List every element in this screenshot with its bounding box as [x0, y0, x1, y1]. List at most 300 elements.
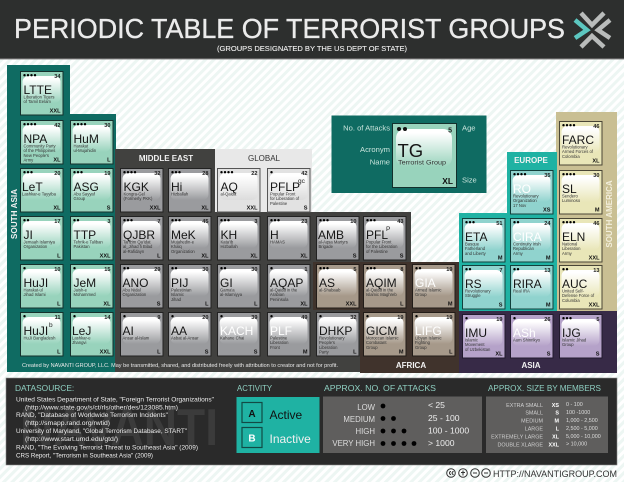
cell: MeK: Mujahedin-e — [171, 240, 195, 244]
cell: Hi: Hizballah — [171, 192, 189, 196]
cell: PFLP gc: Palestine — [270, 201, 288, 206]
cell: LeT: 20 — [54, 171, 60, 177]
panel: datasource: (http://smapp.rand.org/rwtid) — [25, 420, 110, 427]
cell: PLF: PLF — [270, 324, 292, 338]
panel: datasource: CRS Report, "Terrorism in Southeast Asia" (2009) — [16, 452, 153, 460]
cell: ANO: Organization — [122, 292, 147, 297]
panel: approx size by members: L — [556, 426, 560, 432]
cell: AUC: 13 — [593, 268, 600, 274]
cell: LeJ: LeJ — [72, 324, 91, 338]
cell: TTP: Pakistan — [74, 244, 90, 249]
panel: approx size by members: > 10,000 — [566, 442, 587, 448]
cell: ETA: ETA — [465, 230, 487, 244]
cell: AI — [120, 312, 163, 356]
cell: AQ — [218, 168, 260, 212]
cell: CIRA — [510, 218, 553, 262]
cell: PIJ: PIJ — [171, 276, 188, 290]
cell: NPA: of the Philippines — [24, 148, 55, 153]
cell: TTP — [70, 216, 113, 260]
cell: PIJ — [168, 264, 211, 308]
cell: AQAP: al-Qaida in the — [270, 288, 298, 292]
cell: AA: Asbat al-Ansar — [171, 336, 199, 340]
cell: LTTE — [20, 72, 63, 115]
cell: JeM: 15 — [104, 267, 110, 273]
cell: RO: Organization — [513, 198, 537, 203]
cell: QJBR: al_Jihad fi Bilad — [123, 244, 153, 249]
credit line: Created by NAVANTI GROUP, LLC. May be transmitted, shared, and distributed freely with attribution to creator and not for profit. — [22, 363, 338, 369]
panel: datasource: DATASOURCE: — [15, 383, 74, 393]
cell: IMU: Movement — [465, 342, 485, 347]
cell: AS: al-Shabaab — [319, 288, 341, 292]
cell: JI: Jemaah Islamiya — [24, 240, 56, 244]
cell: GICM: M — [399, 350, 404, 356]
panel: approx size by members: APPROX. SIZE BY MEMBERS — [488, 384, 601, 393]
cell: HuJI: 10 — [54, 267, 60, 273]
panel: approx size by members: 100 -1000 — [566, 410, 590, 416]
cell: PFLP gc: PFLP — [270, 180, 300, 194]
cell: PLF: Liberation — [270, 340, 289, 345]
cell: MeK: Khalq — [171, 244, 182, 249]
cell: KACH: S — [254, 350, 258, 356]
legend panel: key to a cell: 5 — [448, 128, 452, 134]
cell: JeM — [70, 264, 113, 308]
cell: Hi: XL — [201, 206, 209, 212]
legend panel: key to a cell: Terrorist Group — [398, 160, 446, 166]
cell: PFLP gc: for Liberation of — [270, 196, 300, 201]
panel: activity key: ACTIVITY — [237, 384, 273, 393]
cell: ELN: National — [562, 242, 577, 246]
cell: PFL p: Popular Front — [366, 240, 392, 244]
cell: PFLP gc: 42 — [301, 171, 308, 177]
cell: AUC: AUC — [562, 277, 588, 291]
cell: H: HAMAS — [270, 240, 285, 244]
cell: ELN: XXL — [589, 256, 600, 262]
cell: Hi — [168, 168, 211, 212]
cell: AS: AS — [319, 276, 335, 290]
cell: RIRA: 13 — [544, 268, 550, 274]
cell: DHKP: People's — [319, 340, 335, 345]
cell: H — [268, 216, 310, 260]
cell: AUC — [560, 266, 602, 309]
cell: ELN — [560, 218, 602, 262]
panel: approx size by members: M — [554, 418, 560, 424]
cell: GIA: Group — [415, 292, 427, 297]
cell: ASG: S — [107, 206, 111, 212]
cell: HuJI: Harakat-ul — [24, 288, 43, 292]
cell: KH: KH — [220, 228, 237, 242]
cell: RO: Revolutionary — [513, 194, 540, 198]
cell: QJBR — [120, 216, 163, 260]
cell: RS — [462, 266, 505, 309]
cell: IMU: XL — [495, 352, 503, 358]
cell: JeM: Mohammed — [74, 292, 96, 297]
panel: South Asia — [7, 65, 116, 372]
cell: AUC: Columbia — [562, 298, 580, 303]
cell: LTTE: of Tamil Eelam — [24, 99, 51, 104]
heading: South America: SOUTH AMERICA — [605, 180, 614, 248]
cell: AI: Ansar al-Islam — [122, 336, 150, 340]
cell: GIA: M — [448, 302, 453, 308]
legend panel: key to a cell: Size — [462, 176, 477, 184]
cell: RIRA: RIRA — [513, 277, 542, 291]
panel: approx number of attacks: 100 - 1000 — [428, 426, 469, 436]
panel: approx size by members: SMALL — [525, 410, 543, 416]
cell: RIRA: Real IRA — [513, 288, 530, 294]
cell: KH: Hizballah — [220, 244, 238, 249]
cell: PFLP gc — [268, 168, 310, 212]
panel: South America — [556, 112, 617, 312]
cell: ANO: S — [157, 302, 161, 308]
legend panel: key to a cell — [332, 116, 486, 193]
cell: ETA: M — [498, 256, 503, 262]
cell: LTTE: LTTE — [24, 83, 52, 97]
cell: NPA: New People's — [24, 153, 49, 158]
cell: ELN: ELN — [562, 230, 585, 244]
cell: IMU — [462, 314, 505, 358]
cell: MeK: MeK — [171, 228, 196, 242]
cell: GIA: GIA — [415, 276, 436, 290]
panel: approx size by members: EXTRA SMALL — [506, 403, 543, 409]
cell: CIRA: CIRA — [513, 230, 542, 244]
panel: approx number of attacks: HIGH — [356, 427, 375, 436]
cell: ETA — [462, 218, 505, 262]
cell: H: XL — [300, 254, 308, 260]
cell: RO: 35 — [544, 173, 550, 179]
cell: CIRA: Republican — [513, 246, 535, 251]
cell: SL: Luminoso — [562, 198, 581, 203]
cell: RS: Revolutionary — [465, 288, 492, 294]
cell: FARC: 46 — [593, 124, 600, 130]
cell: TTP: TTP — [74, 228, 96, 242]
cell: FARC: Armed Forces of — [562, 149, 594, 154]
panel: activity key: Inactive — [270, 432, 311, 446]
heading: Asia: ASIA — [521, 361, 541, 370]
heading: Europe: EUROPE — [514, 156, 549, 165]
icon: active A: A — [248, 409, 256, 420]
legend panel: key to a cell: XL — [442, 176, 453, 186]
cell: AMB: Brigade — [318, 244, 334, 249]
cell: HuJI b — [20, 312, 63, 356]
cell: SL: M — [595, 208, 600, 214]
panel: approx number of attacks — [323, 384, 482, 453]
cell: JeM: XL — [103, 302, 111, 308]
cell: AMB: S — [353, 254, 357, 260]
cell: AS — [316, 264, 359, 308]
cell: RO: XS — [543, 208, 551, 214]
cell: AQ: XXL — [247, 206, 258, 212]
panel: approx size by members: EXTREMELY LARGE — [491, 434, 543, 440]
cell: CIRA: M — [546, 256, 551, 262]
cell: ELN: Liberation — [562, 246, 581, 251]
cell: H: 23 — [301, 219, 308, 225]
cell: QJBR: QJBR — [123, 228, 155, 242]
cell: SL: Sendero — [562, 194, 579, 198]
cell: HuM — [70, 120, 113, 164]
cell: ASh: 26 — [544, 317, 550, 323]
cell: ASG: ASG — [74, 180, 99, 194]
cell: LTTE: XXL — [50, 108, 61, 114]
cell: RS: Struggle — [465, 293, 481, 298]
cell: QJBR: al-Rafidayn — [123, 249, 145, 254]
icon: Navanti logo — [575, 13, 610, 47]
cell: HuJI: HuJI — [24, 276, 48, 290]
cell: AQAP: AQAP — [270, 276, 303, 290]
cell: RO: 17 Nov — [513, 203, 527, 208]
cell: ANO: 29 — [154, 267, 160, 273]
cell: MeK: 45 — [202, 219, 208, 225]
cell: AQIM: Islamic Maghreb — [366, 292, 397, 297]
cell: PFL p: of Palestine — [366, 249, 389, 254]
cell: FARC: FARC — [562, 133, 594, 147]
cell: AI: AI — [122, 324, 134, 338]
cell: PIJ: L — [205, 302, 209, 308]
cell: ANO: ANO — [122, 276, 149, 290]
heading: Middle East: MIDDLE EAST — [139, 154, 193, 163]
cell: AQIM: L — [400, 302, 404, 308]
cell: JI: 17 — [54, 219, 60, 225]
panel: approx number of attacks: > 1000 — [428, 438, 455, 448]
cell: AA: 20 — [202, 315, 208, 321]
footer url: HTTP://NAVANTIGROUP.COM — [493, 468, 617, 479]
cell: LIFG: Fighting — [415, 340, 431, 345]
cell: LeT: XL — [53, 206, 61, 212]
cell: NPA: XL — [53, 158, 61, 164]
cell: LeJ: Jhangvi — [72, 340, 87, 345]
cell: GI: al-Islamiyya — [220, 292, 243, 297]
cell: MeK: XL — [201, 254, 209, 260]
cell: AQ: al-Qaida — [220, 192, 237, 196]
cell: NPA: Army — [24, 158, 34, 163]
cell: PFL p: 43 — [397, 219, 404, 225]
cell: FARC: Colombia — [562, 154, 580, 159]
cell: RS: RS — [465, 277, 482, 291]
panel: datasource: RAND, "Database of Worldwide Terrorism Incidents" — [16, 412, 168, 419]
cell: LIFG: Libyan Islamic — [415, 336, 442, 340]
panel: approx size by members: 1,000 - 2,500 — [566, 418, 598, 424]
cell: IMU: of Uzbekistan — [465, 347, 491, 352]
cell: KGK: (Formerly PKK) — [124, 196, 153, 201]
cell: LIFG — [412, 312, 455, 356]
cell: KGK — [120, 168, 163, 212]
cell: AQ: AQ — [220, 180, 238, 194]
cell: AA: AA — [171, 324, 187, 338]
cell: GI: GI — [220, 276, 233, 290]
cell: HuJI: Jihad Islami — [24, 292, 46, 297]
cell: PFLP gc: Popular Front — [270, 192, 296, 196]
cell: AQIM: al-Qaida in the — [366, 288, 394, 292]
panel: datasource: University of Maryland, "Global Terrorism Database, START" — [16, 428, 187, 435]
cell: AS: XXL — [346, 302, 357, 308]
cell: ASh: Aum Shinrikyo — [513, 338, 541, 342]
cell: GIA: 19 — [446, 267, 452, 273]
cell: PLF: 49 — [301, 315, 308, 321]
heading: Global: GLOBAL — [248, 154, 281, 163]
panel: Europe — [459, 152, 557, 312]
cell: PIJ: 30 — [202, 267, 208, 273]
cell: AQIM: 8 — [400, 267, 404, 273]
cell: FARC — [560, 122, 602, 165]
cell: PFL p: PFL — [366, 228, 388, 242]
cell: NPA: Community Party — [24, 144, 57, 148]
cell: PLF: Palestine — [270, 336, 288, 340]
cell: HuJI — [20, 264, 63, 308]
cell: PFLP gc: gc — [298, 178, 306, 185]
panel: datasource: United States Department of State, "Foreign Terrorist Organizations" — [16, 396, 214, 404]
cell: PLF — [268, 312, 310, 356]
panel: approx number of attacks: LOW — [357, 403, 376, 412]
cell: LIFG: L — [449, 350, 453, 356]
panel: approx size by members: MEDIUM — [521, 418, 543, 424]
cell: AQ: 22 — [251, 171, 258, 177]
cell: IJG: 5 — [596, 317, 600, 323]
cell: MeK — [168, 216, 211, 260]
cell: JeM: JeM — [74, 276, 96, 290]
cell: LIFG: LIFG — [415, 324, 442, 338]
cell: FARC: XL — [592, 158, 600, 164]
cell: PFL p: S — [400, 254, 404, 260]
cell: AQAP: XL — [300, 302, 308, 308]
watermark: NAVANTI — [20, 399, 218, 457]
panel: approx number of attacks: 25 - 100 — [428, 413, 460, 423]
cell: AMB: al-Aqsa Martyrs — [318, 240, 348, 244]
panel: datasource — [15, 383, 214, 460]
cell: KGK: KGK — [124, 180, 149, 194]
cell: HuJI b: HuJI Bangladesh — [24, 336, 56, 340]
cell: HuM: Harakat — [74, 144, 89, 148]
cell: RO: RO — [513, 182, 531, 196]
cell: KGK: 32 — [154, 171, 160, 177]
panel: datasource: (http://www.state.gov/s/ct/rls/other/des/123085.htm) — [25, 404, 178, 412]
cell: RIRA: M — [546, 302, 551, 308]
cell: PFLP gc: S — [304, 206, 308, 212]
cell: AMB — [316, 216, 359, 260]
cell: NPA: 42 — [54, 123, 60, 129]
cell: AS: 5 — [353, 267, 356, 273]
panel: approx number of attacks: VERY HIGH — [332, 439, 375, 448]
cell: GI — [218, 264, 260, 308]
cell: SL: SL — [562, 182, 577, 196]
cell: KGK: Kongra-Gel — [124, 192, 145, 196]
cell: GIA: Armed Islamic — [415, 288, 442, 292]
cell: PIJ: Islamic — [171, 292, 184, 297]
cell: JI — [20, 216, 63, 260]
legend panel: key to a cell: No. of Attacks — [343, 124, 390, 132]
cell: DHKP: Liberation — [319, 345, 338, 350]
cell: KACH: KACH — [220, 324, 253, 338]
cell: Hi: 28 — [202, 171, 208, 177]
cell: AI: 9 — [157, 315, 160, 321]
cell: HuM: 30 — [104, 123, 110, 129]
cell: GI: Gama'a — [220, 288, 235, 292]
cell: IJG: Group — [562, 342, 574, 347]
title: PERIODIC TABLE OF TERRORIST GROUPS — [14, 13, 565, 44]
cell: AQIM: AQIM — [366, 276, 397, 290]
panel: approx size by members: 0 - 100 — [566, 402, 583, 408]
cell: JI: JI — [24, 228, 33, 242]
cell: IJG — [560, 314, 602, 358]
cell: RS: 7 — [499, 268, 502, 274]
panel: approx size by members: 2,500 - 5,000 — [566, 426, 598, 432]
cell: GI: 30 — [251, 267, 258, 273]
cell: NPA — [20, 120, 63, 164]
header banner — [0, 0, 624, 60]
cell: LTTE: Liberation Tigers — [24, 94, 54, 100]
cell: LTTE: 34 — [54, 74, 61, 80]
cell: HuJI b: 11 — [55, 315, 60, 321]
cell: PFL p: P — [386, 226, 390, 233]
panel: Middle East — [115, 149, 411, 372]
cell: LIFG: 19 — [446, 315, 452, 321]
cell: GICM: Group — [366, 345, 378, 350]
cell: PLF: M — [303, 350, 308, 356]
cell: LeT: Lashkar-e Tayyiba — [22, 192, 57, 196]
cell: LeT: LeT — [22, 180, 43, 194]
cell: AUC: Defense Force of — [562, 293, 595, 298]
panel: Global — [215, 149, 312, 212]
cell: H: H — [270, 228, 279, 242]
cell: AQAP: Peninsula — [270, 297, 289, 302]
cell: CIRA: Army — [513, 251, 524, 256]
cell: GICM: Combatant — [366, 340, 387, 345]
cell: LeJ: XXL — [100, 350, 111, 356]
cell: AA: S — [205, 350, 209, 356]
panel: Asia — [459, 311, 617, 373]
cell: AUC: United Self- — [562, 288, 584, 294]
cell: IMU: Islamic — [465, 338, 478, 342]
cell: IJG: S — [596, 352, 600, 358]
cell: HuJI: L — [57, 302, 61, 308]
cell: ANO: Abu Nidal — [122, 288, 141, 292]
cell: AQAP: 1 — [304, 267, 308, 273]
icons: creative commons licence — [447, 469, 490, 477]
cell: SL — [560, 170, 602, 214]
cell: KACH — [218, 312, 260, 356]
cell: KH: 3 — [254, 219, 258, 225]
cell: ETA: Basque — [465, 242, 480, 246]
panel: approx size by members: DOUBLE XLARGE — [497, 442, 543, 448]
cell: ASh — [510, 314, 553, 358]
cell: LeT — [20, 168, 63, 212]
cell: ASh: S — [547, 352, 551, 358]
cell: ASG: Abu Sayyaf — [74, 192, 96, 196]
panel: approx size by members: XXL — [549, 442, 560, 448]
cell: PIJ: Palestinian — [171, 288, 192, 292]
cell: DHKP: Party — [319, 350, 330, 355]
cell: KGK: XXL — [150, 206, 161, 212]
heading: Africa: AFRICA — [396, 361, 426, 370]
cell: IMU: 19 — [496, 317, 502, 323]
panel: approx number of attacks: APPROX. NO. OF ATTACKS — [324, 384, 436, 393]
heading: South Asia: SOUTH ASIA — [10, 189, 19, 239]
panel: approx size by members: 5,000 - 10,000 — [566, 434, 601, 440]
cell: PIJ: Jihad — [171, 297, 182, 302]
cell: ASG — [70, 168, 113, 212]
cell: GICM: 19 — [397, 315, 404, 321]
cell: ETA: 51 — [496, 221, 502, 227]
cell: AQAP: Arabian — [270, 292, 285, 297]
legend panel: key to a cell: Name — [370, 158, 390, 166]
cell: PFL p — [364, 216, 406, 260]
cell: HuJI b: HuJI — [24, 324, 48, 338]
cell: DHKP — [316, 312, 359, 356]
icon: inactive B: B — [248, 434, 256, 444]
cell: SL: 30 — [593, 173, 600, 179]
cell: TTP: XXL — [100, 254, 111, 260]
panel: approx size by members: LARGE — [525, 426, 543, 432]
cell: ASG: Group — [74, 196, 86, 201]
cell: QJBR: L — [157, 254, 161, 260]
cell: AUC: XXL — [589, 302, 600, 308]
